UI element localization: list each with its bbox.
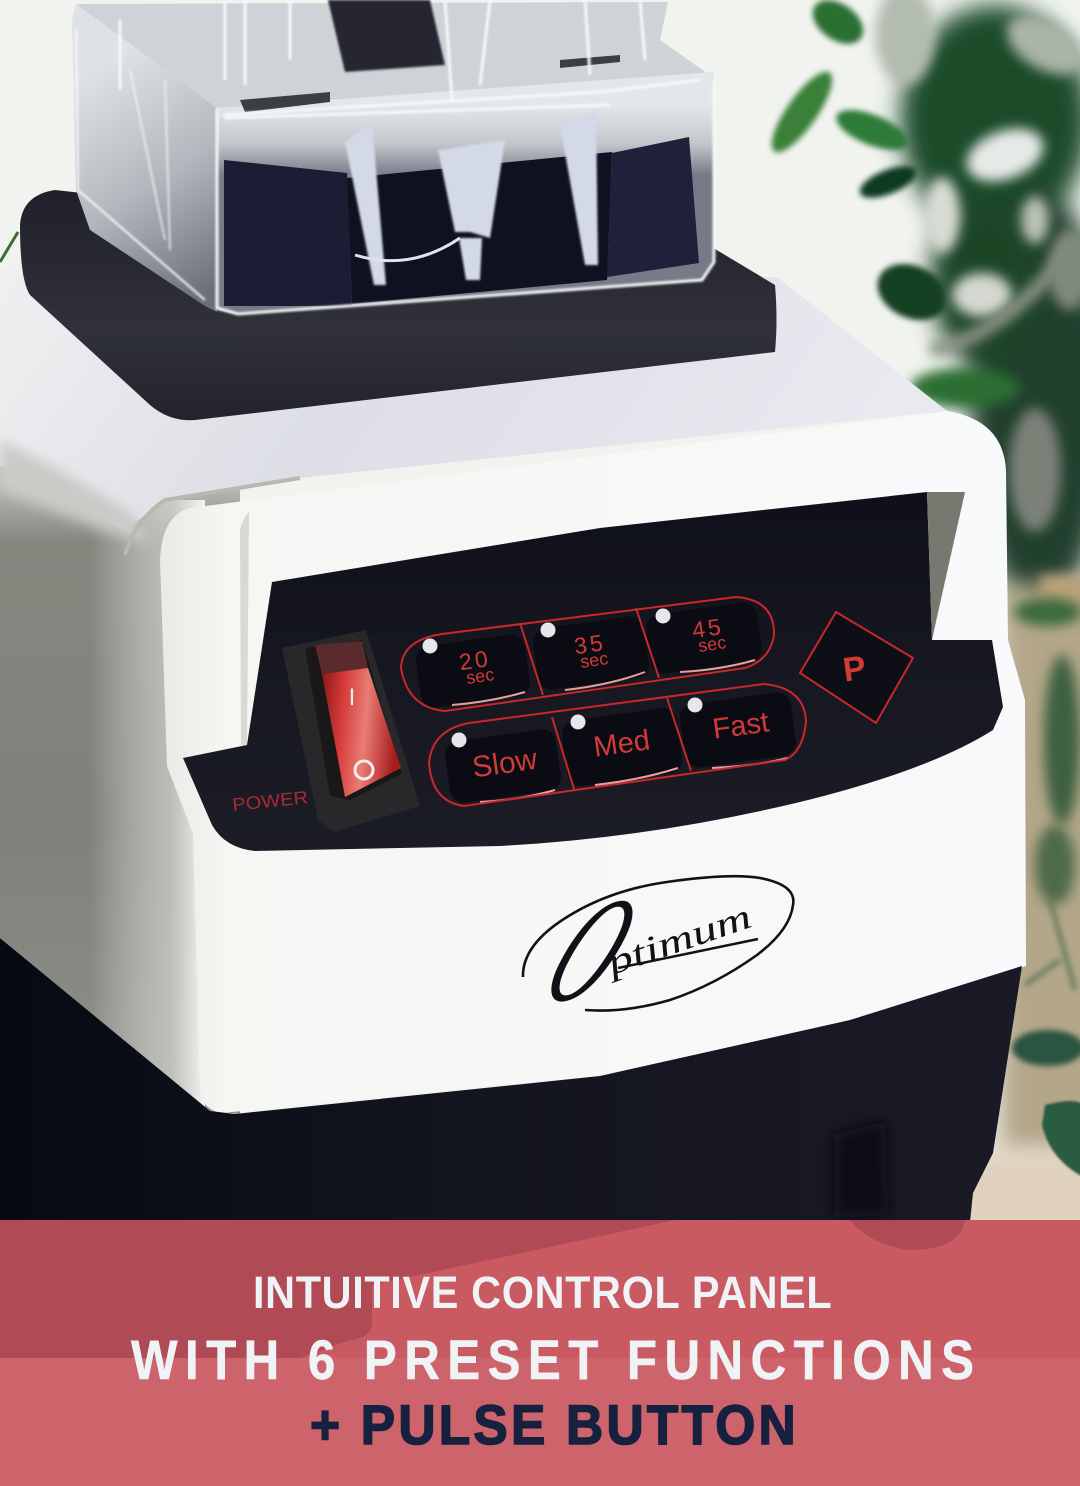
- blender: left crease in the hood: [240, 512, 249, 745]
- jar: upper glass: [76, 2, 714, 108]
- blender: shell front with hood and lower panel: [160, 411, 1026, 1113]
- blender: clear jar: [72, 0, 714, 314]
- preset buttons: speed row: Fast: [711, 706, 771, 746]
- blender: shoulder ridge: [125, 478, 300, 555]
- background: table and lower plant: [950, 575, 1080, 1240]
- jar: left glass face: [72, 4, 217, 312]
- preset buttons: timer row: 45: [690, 613, 725, 643]
- background: blurred plant foliage: [762, 0, 1080, 610]
- jar: navy inner blocks: [224, 160, 352, 306]
- blender: top surface of the body: [0, 262, 947, 530]
- background: green stem at left: [0, 232, 18, 262]
- logo: Optimum: [520, 864, 793, 1036]
- preset buttons: timer row: sec: [697, 632, 727, 656]
- panel: black control panel: [183, 492, 1003, 851]
- power rocker switch: I: [349, 684, 355, 711]
- blender: side highlight toward the front corner: [90, 500, 205, 1112]
- preset buttons: speed row: [429, 684, 806, 806]
- preset buttons: speed row: Med: [592, 724, 652, 764]
- preset buttons: timer row: 20: [457, 645, 492, 675]
- logo: Optimum: O: [520, 864, 663, 1036]
- jar: blade ribs: [345, 110, 598, 285]
- preset buttons: speed row: Slow: [470, 743, 539, 784]
- banner: shadow of the blender showing through: [0, 1220, 675, 1358]
- heading line one: INTUITIVE CONTROL PANEL: [253, 1268, 832, 1318]
- jar: dark rim reflections: [240, 55, 620, 112]
- preset buttons: timer row: 35: [572, 629, 607, 659]
- blender: soft shadow edge on the shoulder: [0, 440, 150, 545]
- jar: front glass face: [217, 72, 714, 314]
- jar: dark centre column: [328, 0, 445, 72]
- blender: black base: [0, 938, 1022, 1222]
- preset buttons: timer row: sec: [579, 648, 609, 672]
- banner: shadow of the blender foot: [850, 1220, 965, 1250]
- power switch housing: [282, 630, 420, 832]
- panel: hood inner wall: [927, 492, 965, 640]
- preset buttons: timer row: sec: [465, 664, 495, 688]
- heading line two: WITH 6 PRESET FUNCTIONS: [131, 1329, 974, 1392]
- logo: Optimum: ptimum: [598, 896, 756, 984]
- preset buttons: timer row: [401, 597, 774, 711]
- blender: base recess: [835, 1122, 888, 1218]
- blender: gray left side of the body: [0, 300, 240, 1114]
- heading line three: + PULSE BUTTON: [310, 1394, 796, 1456]
- pulse button: [800, 612, 913, 723]
- caption banner: [0, 1220, 1080, 1486]
- blender: textured base pad: [20, 190, 776, 420]
- pulse button: P: [841, 649, 868, 690]
- power rocker switch: [315, 641, 401, 797]
- label: POWER: POWER: [231, 787, 309, 815]
